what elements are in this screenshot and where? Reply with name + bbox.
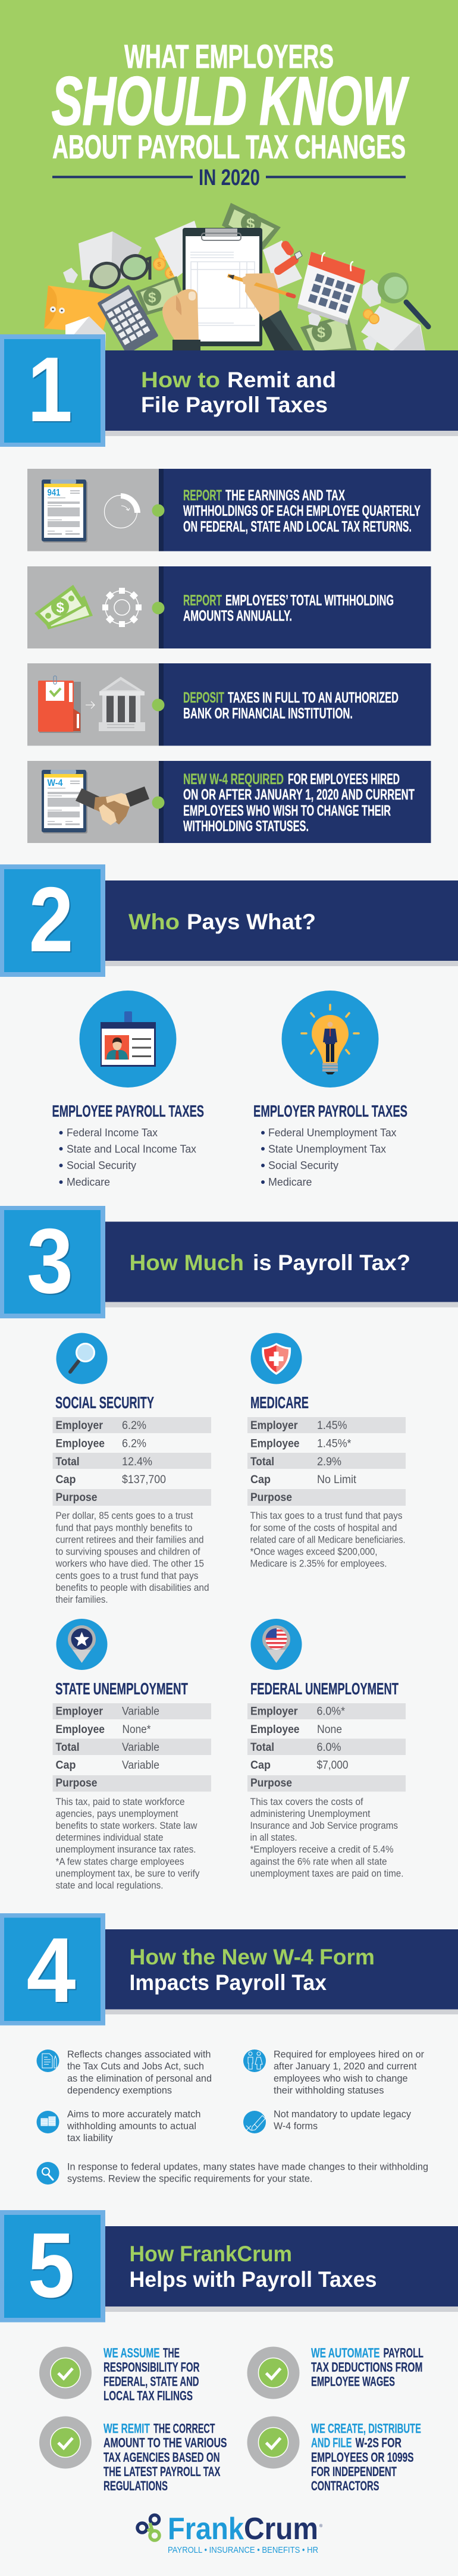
service: assume responsibility (39, 2345, 200, 2403)
item: not mandatory: W-4 forms (274, 2121, 318, 2132)
item: required employees: Required for employees hired on or (274, 2049, 424, 2060)
service: assume responsibility: RESPONSIBILITY FOR (103, 2359, 200, 2375)
table: None* (123, 1723, 151, 1736)
list: employee taxes: Social Security (67, 1159, 136, 1171)
item: withholding match: withholding amounts to actual (67, 2121, 196, 2132)
text block: purpose (250, 1510, 406, 1569)
service: automate deductions: EMPLOYEE WAGES (311, 2374, 395, 2389)
icon: quarter circle (105, 493, 140, 528)
section 4 header (0, 1913, 458, 2025)
icon: money bills: $ (56, 600, 64, 616)
illustration: desk with clipboard and documents: $ (246, 215, 255, 233)
item: state requirements: systems. Review the specific requirements for your state. (67, 2174, 313, 2185)
illustration: desk with clipboard and documents: $ (317, 324, 325, 341)
table: Total (56, 1456, 80, 1468)
text block: purpose (55, 1510, 209, 1605)
text block: purpose: Insurance and Job Service programs (250, 1820, 398, 1831)
text block: purpose: unemployment taxes are paid on time. (250, 1868, 403, 1879)
section 4 header: Impacts Payroll Tax (130, 1970, 327, 1995)
section 5 header: 5 (27, 2214, 75, 2317)
table: Purpose (250, 1491, 292, 1504)
service: assume responsibility: THE (163, 2345, 180, 2361)
service: create W-2s and 1099s: EMPLOYEES OR 1099S (311, 2450, 414, 2465)
section 1 header: 1 (27, 338, 73, 441)
section 3 header: 3 (27, 1209, 73, 1312)
text block: purpose: related care of all Medicare beneficiaries. (250, 1535, 406, 1546)
text block: purpose: Per dollar, 85 cents goes to a trust (56, 1510, 193, 1521)
table: Employee (56, 1723, 105, 1736)
icon: magnifier (56, 1333, 107, 1384)
service: automate deductions (247, 2345, 424, 2399)
heading: STATE UNEMPLOYMENT (55, 1679, 188, 1698)
item: tax cuts: as the elimination of personal and (67, 2073, 212, 2084)
section 2 header (0, 864, 458, 977)
table (52, 1417, 211, 1506)
illustration: desk with clipboard and documents (44, 203, 428, 355)
item: required employees: employees who wish to change (274, 2073, 408, 2084)
table: None (317, 1723, 342, 1736)
item: withholding match: tax liability (67, 2133, 113, 2143)
panel: employee payroll taxes (52, 991, 204, 1188)
table: Employee (56, 1437, 105, 1450)
logo: FrankCrum: PAYROLL • INSURANCE • BENEFITS • HR (168, 2545, 318, 2555)
section 4 header: 4 (26, 1919, 76, 2022)
text block: purpose: unemployment tax, be sure to verify (56, 1868, 200, 1879)
table: 6.2% (122, 1437, 146, 1450)
text block: purpose: *Employers receive a credit of 5.4% (250, 1844, 394, 1855)
step text: WITHHOLDING STATUSES. (183, 818, 309, 835)
table: Variable (122, 1741, 159, 1754)
text block: purpose: This tax covers the costs of (250, 1797, 363, 1807)
section 1 header (0, 334, 458, 447)
item: tax cuts: dependency exemptions (67, 2085, 172, 2096)
icon: bank building (99, 677, 145, 731)
item: tax cuts: the Tax Cuts and Jobs Act, such (67, 2061, 204, 2072)
service: remit correct amount: TAX AGENCIES BASED ON (103, 2450, 220, 2465)
list: employer taxes: State Unemployment Tax (268, 1143, 386, 1155)
service: create W-2s and 1099s: AND FILE (311, 2436, 352, 2450)
icon: form 941 on clipboard (42, 480, 87, 543)
text block: purpose: state and local regulations. (56, 1880, 163, 1891)
service: create W-2s and 1099s (247, 2417, 421, 2493)
text block: purpose: This tax, paid to state workforce (56, 1797, 184, 1807)
panel: social security (52, 1333, 211, 1605)
list: employer taxes: Medicare (268, 1176, 312, 1188)
section 4 header: How the New W-4 Form (130, 1945, 375, 1969)
table: Total (250, 1741, 274, 1754)
table: Total (56, 1741, 80, 1754)
section 2 header: 2 (30, 869, 75, 972)
table: Employee (250, 1437, 300, 1450)
step row: report annually (27, 566, 431, 648)
item: required employees: their withholding statuses (274, 2085, 384, 2096)
icon: lightbulb with person (282, 991, 378, 1088)
section 5 header: Helps with Payroll Taxes (130, 2267, 377, 2292)
icon: red folder (38, 676, 81, 733)
logo: FrankCrum: Crum (244, 2512, 318, 2546)
item: state requirements (37, 2162, 428, 2185)
service: assume responsibility: FEDERAL, STATE AND (103, 2374, 199, 2389)
step text: AMOUNTS ANNUALLY. (183, 608, 292, 625)
item: not mandatory (243, 2109, 412, 2133)
table: Employer (56, 1705, 103, 1718)
table: Employer (56, 1419, 103, 1432)
list: employer taxes: Social Security (268, 1159, 338, 1171)
table: Total (250, 1456, 274, 1468)
panel: employer payroll taxes (253, 991, 407, 1188)
step row: report quarterly (27, 469, 431, 551)
table: Purpose (56, 1491, 98, 1504)
icon: arrow (86, 701, 95, 709)
panel: FrankCrum services (39, 2345, 424, 2493)
section 5 header: How FrankCrum (130, 2242, 292, 2266)
section 1 header: File Payroll Taxes (141, 393, 328, 417)
title: WHAT EMPLOYERS (124, 37, 334, 75)
text block: purpose: their families. (56, 1594, 108, 1605)
heading: EMPLOYEE PAYROLL TAXES (52, 1102, 204, 1120)
item: tax cuts: Reflects changes associated with (67, 2049, 211, 2060)
service: assume responsibility: WE ASSUME (103, 2345, 159, 2361)
text block: purpose (250, 1797, 403, 1879)
text block: purpose: to surviving spouses and children of (56, 1547, 200, 1557)
step text: BANK OR FINANCIAL INSTITUTION. (183, 706, 353, 722)
text block: purpose: unemployment insurance tax rates. (56, 1844, 196, 1855)
icon: annual cycle (102, 588, 142, 627)
step text: REPORT (183, 487, 222, 504)
section 1 header: How to (141, 368, 220, 392)
step text (183, 771, 415, 835)
table: 6.0% (316, 1741, 341, 1754)
logo: FrankCrum (137, 2512, 323, 2555)
step text: DEPOSIT (183, 690, 224, 706)
item: state requirements: In response to federal updates, many states have made changes to their withholding (67, 2162, 428, 2173)
panel: federal unemployment (247, 1619, 406, 1879)
text block: purpose: administering Unemployment (250, 1809, 371, 1819)
icon: handshake (76, 786, 149, 825)
icon: form 941 on clipboard: 941 (48, 488, 61, 498)
table: 6.0%* (316, 1705, 346, 1718)
service: remit correct amount: REGULATIONS (103, 2478, 168, 2493)
table: 12.4% (122, 1456, 152, 1468)
text block: purpose: against the 6% rate when all state (250, 1856, 387, 1867)
list: employee taxes: Federal Income Tax (67, 1127, 158, 1139)
item: withholding match: Aims to more accurately match (67, 2109, 201, 2120)
service: remit correct amount: AMOUNT TO THE VARIOUS (103, 2436, 227, 2450)
table: 6.2% (122, 1419, 146, 1432)
service: automate deductions: WE AUTOMATE (311, 2345, 379, 2361)
text block: purpose: This tax goes to a trust fund that pays (250, 1510, 402, 1521)
service: remit correct amount: THE CORRECT (153, 2421, 215, 2436)
service: create W-2s and 1099s: FOR INDEPENDENT (311, 2464, 397, 2479)
section 5 header (0, 2210, 458, 2323)
section 5 header: 5 (29, 2215, 76, 2318)
step text: REPORT (183, 593, 222, 609)
item: withholding match (37, 2109, 201, 2143)
table: 1.45%* (317, 1437, 352, 1450)
section 3 header: is Payroll Tax? (253, 1251, 410, 1275)
table: Purpose (250, 1777, 292, 1790)
logo: FrankCrum: Frank (168, 2512, 244, 2546)
title (52, 37, 409, 190)
list: employer taxes (261, 1127, 396, 1188)
panel: medicare (247, 1333, 406, 1569)
table: Employee (250, 1723, 300, 1736)
text block: purpose: benefits to people with disabilities and (56, 1582, 209, 1593)
text block: purpose: Medicare is 2.35% for employees. (250, 1559, 387, 1569)
icon: ID badge (80, 991, 176, 1088)
text block: purpose (56, 1797, 200, 1891)
text block: purpose: for some of the costs of hospital and (250, 1523, 397, 1534)
table: No Limit (317, 1474, 357, 1486)
table: Employer (250, 1705, 298, 1718)
text block: purpose: benefits to state workers. State law (56, 1820, 197, 1831)
text block: purpose: current retirees and their families and (56, 1535, 203, 1546)
table: Cap (250, 1759, 271, 1772)
list: employee taxes: State and Local Income Tax (67, 1143, 196, 1155)
list: employee taxes: Medicare (67, 1176, 110, 1188)
section 2 header: Who (128, 910, 180, 934)
table: 2.9% (317, 1456, 341, 1468)
table: $137,700 (122, 1474, 166, 1486)
table: 1.45% (317, 1419, 347, 1432)
section 1 header: Remit and (227, 368, 336, 392)
service: automate deductions: PAYROLL (383, 2345, 424, 2361)
icon: W-4 form on clipboard (42, 770, 87, 833)
heading: SOCIAL SECURITY (55, 1393, 154, 1412)
panel: W-4 impact items (37, 2049, 428, 2185)
service: remit correct amount: WE REMIT (103, 2421, 150, 2436)
service: remit correct amount: THE LATEST PAYROLL TAX (103, 2464, 220, 2479)
section 3 header (0, 1206, 458, 1318)
text block: purpose: determines individual state (56, 1832, 163, 1843)
text block: purpose: *A few states charge employees (56, 1856, 184, 1867)
step text: NEW W-4 REQUIRED (183, 771, 284, 788)
illustration: desk with clipboard and documents: $ (163, 252, 167, 259)
table: Variable (122, 1759, 159, 1772)
section 3 header: How Much (130, 1251, 244, 1275)
table: Cap (56, 1474, 76, 1486)
illustration: desk with clipboard and documents: $ (157, 261, 161, 268)
panel: state unemployment (52, 1619, 211, 1891)
section 1 header: 1 (29, 339, 74, 442)
section 2 header: Pays What? (187, 910, 316, 934)
step text (183, 593, 394, 625)
heading: MEDICARE (250, 1393, 309, 1412)
service: remit correct amount (39, 2417, 227, 2493)
table (52, 1703, 211, 1792)
service: assume responsibility: LOCAL TAX FILINGS (103, 2388, 193, 2403)
illustration: desk with clipboard and documents: $ (169, 270, 173, 277)
icon: flag map pin (251, 1619, 302, 1670)
section 2 header: 2 (29, 868, 74, 971)
list: employee taxes (59, 1127, 196, 1188)
step text (183, 690, 399, 722)
logo: FrankCrum: ® (319, 2524, 323, 2528)
table: Cap (56, 1759, 76, 1772)
step row: deposit (27, 663, 431, 746)
service: create W-2s and 1099s: W-2S FOR (356, 2436, 401, 2450)
text block: purpose: in all states. (250, 1832, 297, 1843)
icon: star map pin (56, 1619, 107, 1670)
table: Employer (250, 1419, 298, 1432)
step text: THE EARNINGS AND TAX (225, 487, 345, 504)
text block: purpose: *Once wages exceed $200,000, (250, 1547, 377, 1557)
table: Purpose (56, 1777, 98, 1790)
step row: new W-4 required (27, 761, 431, 843)
title: IN 2020 (199, 165, 260, 190)
text block: purpose: cents goes to a trust fund that pays (56, 1571, 199, 1581)
service: create W-2s and 1099s: CONTRACTORS (311, 2478, 379, 2493)
table: $7,000 (316, 1759, 349, 1772)
item: not mandatory: Not mandatory to update legacy (274, 2109, 412, 2120)
section 4 header: 4 (27, 1920, 77, 2023)
list: employer taxes: Federal Unemployment Tax (268, 1127, 396, 1139)
table (247, 1703, 406, 1792)
header panel (0, 0, 458, 355)
table: Cap (250, 1474, 271, 1486)
item: required employees (243, 2049, 424, 2096)
item: tax cuts (37, 2049, 212, 2096)
icon: W-4 form on clipboard: W-4 (48, 778, 63, 788)
text block: purpose: workers who have died. The other 15 (55, 1559, 204, 1569)
section 3 header: 3 (28, 1211, 74, 1314)
item: required employees: after January 1, 2020 and current (274, 2061, 417, 2072)
icon: money bills (34, 585, 93, 629)
table (247, 1417, 406, 1506)
text block: purpose: fund that pays monthly benefits to (56, 1523, 193, 1534)
text block: purpose: agencies, pays unemployment (56, 1809, 178, 1819)
table: Variable (122, 1705, 159, 1718)
step text (183, 487, 421, 535)
illustration: desk with clipboard and documents: $ (148, 290, 156, 306)
icon: shield (251, 1333, 302, 1384)
